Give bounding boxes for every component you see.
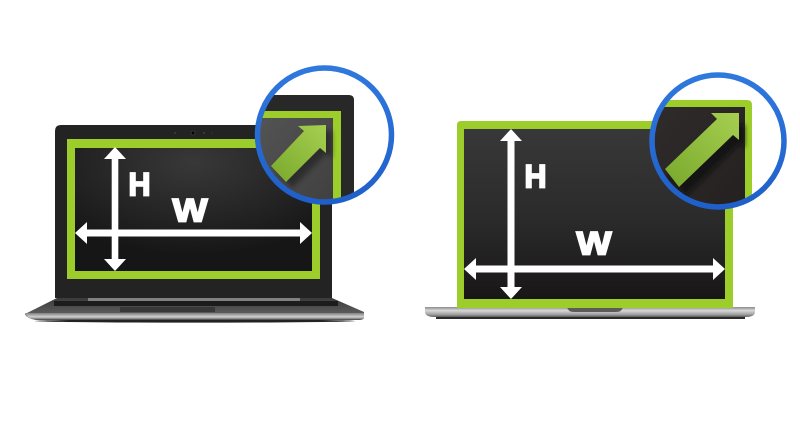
left arrow shadow bbox=[276, 131, 332, 188]
webcam bbox=[174, 131, 213, 135]
right H label: H bbox=[524, 158, 546, 194]
left magnifier contents bbox=[260, 95, 354, 200]
infographic: measuring two laptop screens bbox=[25, 65, 787, 323]
left laptop lid bbox=[55, 125, 332, 298]
left diagonal green arrow bbox=[271, 125, 326, 182]
right arrow shadow bbox=[668, 124, 745, 196]
right screen bbox=[464, 129, 725, 299]
left height arrow bbox=[104, 147, 126, 271]
left width arrow bbox=[75, 222, 312, 244]
right laptop base bbox=[425, 307, 755, 319]
right blue magnifier ring bbox=[652, 75, 784, 207]
right laptop bbox=[425, 74, 785, 319]
left green screen frame bbox=[67, 139, 320, 279]
left W label: W bbox=[172, 192, 208, 228]
left laptop base bbox=[25, 298, 364, 323]
right W label: W bbox=[576, 226, 612, 262]
right diagonal green arrow bbox=[665, 113, 739, 187]
right height arrow bbox=[500, 129, 522, 299]
right green lid frame bbox=[457, 121, 733, 308]
left blue magnifier ring bbox=[258, 68, 392, 202]
left screen bbox=[75, 148, 312, 271]
left H label: H bbox=[128, 166, 150, 202]
right magnifier contents bbox=[655, 100, 752, 204]
left laptop bbox=[25, 68, 392, 323]
right width arrow bbox=[464, 258, 725, 280]
